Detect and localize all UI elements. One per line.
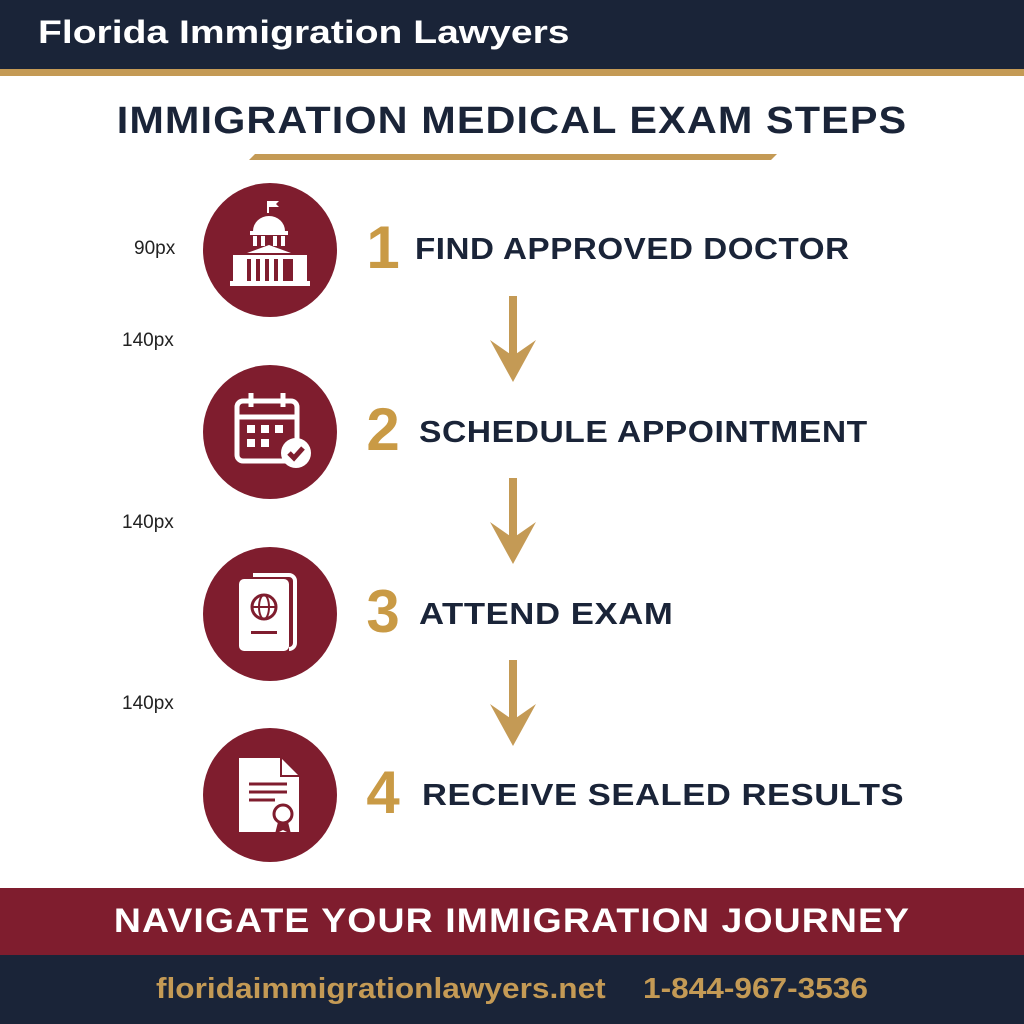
header title: Florida Immigration Lawyers bbox=[38, 14, 570, 50]
number 1: 1 bbox=[366, 214, 400, 281]
number 2: 2 bbox=[366, 396, 400, 463]
text: 140px bbox=[122, 693, 174, 714]
header bar bbox=[0, 0, 1024, 69]
step 3 bbox=[203, 547, 673, 681]
gold header line bbox=[0, 69, 1024, 76]
spacing labels: 90px bbox=[134, 238, 175, 259]
number 3: 3 bbox=[366, 578, 400, 645]
number 4: 4 bbox=[366, 759, 400, 826]
arrow 1 bbox=[490, 296, 536, 382]
icon: calendar bbox=[203, 365, 337, 499]
text: 140px bbox=[122, 512, 174, 533]
step 4 label: RECEIVE SEALED RESULTS bbox=[422, 777, 904, 812]
footer bbox=[0, 955, 1024, 1024]
step 2 bbox=[203, 365, 868, 499]
arrow 2 bbox=[490, 478, 536, 564]
arrow 3 bbox=[490, 660, 536, 746]
step 1 bbox=[203, 183, 850, 317]
footer phone: 1-844-967-3536 bbox=[643, 973, 868, 1005]
tagline text: NAVIGATE YOUR IMMIGRATION JOURNEY bbox=[114, 902, 910, 940]
footer website: floridaimmigrationlawyers.net bbox=[156, 973, 606, 1005]
tagline band bbox=[0, 888, 1024, 955]
text: 140px bbox=[122, 330, 174, 351]
step 2 label: SCHEDULE APPOINTMENT bbox=[419, 414, 868, 449]
title underline bbox=[249, 154, 777, 160]
main title: IMMIGRATION MEDICAL EXAM STEPS bbox=[117, 100, 907, 142]
step 1 label: FIND APPROVED DOCTOR bbox=[415, 231, 850, 266]
step 4 bbox=[203, 728, 904, 862]
step 3 label: ATTEND EXAM bbox=[419, 596, 673, 631]
icon: capitol building bbox=[203, 183, 337, 317]
icon: passport bbox=[203, 547, 337, 681]
icon: sealed document bbox=[203, 728, 337, 862]
